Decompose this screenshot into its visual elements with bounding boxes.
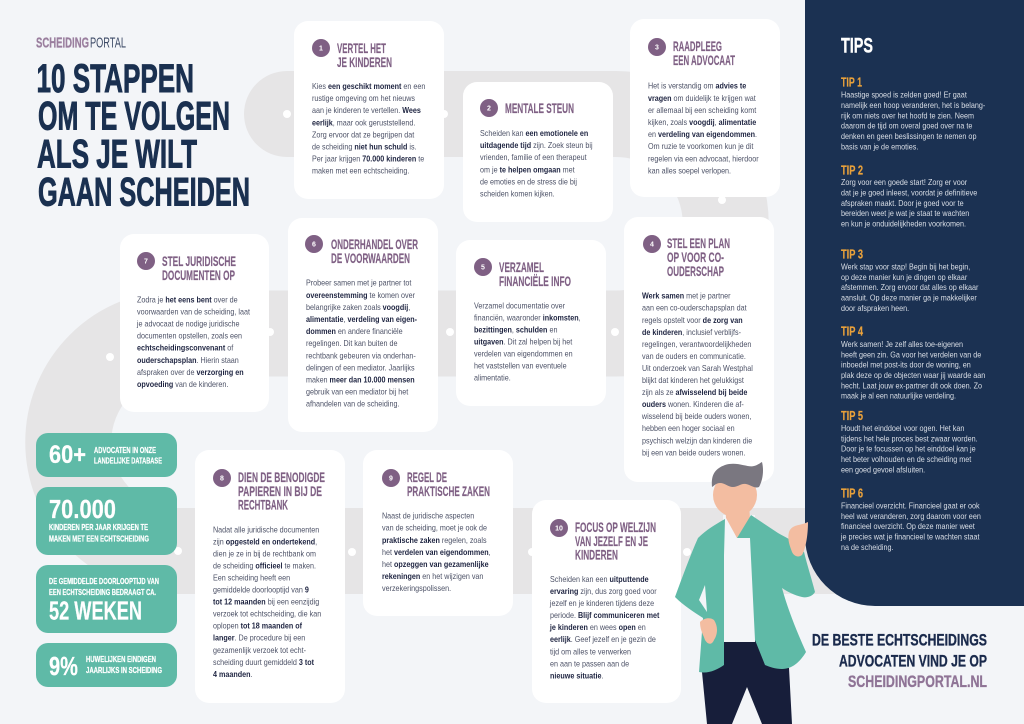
tip 2: TIP 2	[841, 162, 863, 177]
text: step 6: alimentatie, verdeling van eigen-	[306, 315, 417, 324]
icon: number 10: 10	[555, 526, 563, 532]
tip 2: afspraken maakt. Door je goed voor te	[841, 198, 964, 208]
stat: 70.000 kinderen	[36, 487, 177, 555]
logo: ScheidingPortal: SCHEIDING	[36, 34, 89, 52]
heading: step 5	[499, 259, 571, 289]
text: step 9: het opzeggen van gezamenlijke	[382, 560, 489, 569]
icon: number 3: 3	[655, 44, 659, 52]
text: step 9: het verdelen van eigendommen,	[382, 548, 491, 557]
heading: step 8	[238, 469, 325, 512]
heading: step 6: DE VOORWAARDEN	[331, 250, 410, 266]
tip 6: financieel overzicht. Op deze manier weet	[841, 522, 976, 531]
heading: step 9: REGEL DE	[407, 469, 447, 485]
text: step 6: delingen of een mediator. Jaarlijks	[306, 363, 415, 372]
text: step 3: vragen om duidelijk te krijgen wat	[648, 93, 757, 103]
heading: step 1	[337, 40, 392, 70]
tip 4: plak deze op de objecten waar jij waarde aan	[841, 371, 985, 380]
text: step 1: aan je kinderen te vertellen. Wees	[312, 106, 421, 115]
text: step 8: zijn opgesteld en ondertekend,	[213, 537, 317, 546]
text: step 4: aan een co-ouderschapsplan dat	[642, 303, 747, 313]
text: step 1: Per jaar krijgen 70.000 kinderen te	[312, 154, 424, 164]
heading: step 4	[667, 235, 730, 279]
text: step 4: van de ouders en communicatie.	[642, 352, 746, 361]
text: step 6: dommen en andere financiële	[306, 327, 403, 336]
text: step 6: maken meer dan 10.000 mensen	[306, 375, 415, 385]
text: step 5	[474, 301, 581, 382]
text: step 4: wisselend bij beide ouders wonen,	[641, 412, 751, 421]
text: step 4: ouders wonen. Kinderen die af-	[642, 400, 744, 409]
text: step 10: tijd om alles te verwerken	[550, 647, 631, 656]
text: step 2: uitdagende tijd zijn. Zoek steun bij	[480, 141, 593, 150]
tip 1: rijk om niets over het hoofd te zien. Neem	[841, 111, 974, 121]
text: step 8: langer. De procedure bij een	[213, 633, 305, 643]
heading: step 9	[407, 469, 490, 499]
icon: number 10	[550, 519, 568, 537]
tip 1: TIP 1	[841, 75, 862, 90]
icon: number 2: 2	[487, 106, 491, 112]
text: step 9	[382, 511, 491, 593]
text: step 8: gemiddelde doorlooptijd van 9	[213, 585, 309, 595]
panel: step 1	[294, 21, 444, 199]
text: step 3: en verdeling van eigendommen.	[648, 130, 757, 139]
text: step 5: alimentatie.	[474, 373, 511, 382]
text: step 4: Werk samen met je partner	[642, 291, 731, 301]
heading: step 5: VERZAMEL	[499, 259, 544, 275]
tip 1: basis van je de emoties.	[841, 142, 918, 152]
text: step 8: de scheiding officieel te maken.	[213, 561, 316, 571]
text: step 4: bij een van beide ouders wonen.	[642, 448, 745, 457]
tip 6: Financieel overzicht. Financieel gaat er ook	[841, 501, 980, 511]
text: step 4: regelingen, verantwoordelijkheden	[642, 340, 751, 349]
stat: 60+ advocaten: 60+	[49, 441, 86, 469]
tip 2: en kun je onduidelijkheden voorkomen.	[841, 219, 966, 229]
text: step 3: regelen via een advocaat, hierdoor	[648, 154, 759, 163]
heading: step 1: JE KINDEREN	[337, 54, 392, 70]
icon: number 4: 4	[650, 242, 654, 248]
text: step 3: er allemaal bij een scheiding komt	[648, 106, 757, 115]
text: step 2: de emoties en de stress die bij	[480, 177, 577, 186]
tip 3: TIP 3	[841, 247, 863, 262]
heading: step 7	[162, 253, 236, 283]
text: step 4: de kinderen, inclusief verblijfs-	[642, 328, 741, 337]
stat: 70.000 kinderen: MAKEN MET EEN ECHTSCHEIDING	[49, 534, 149, 544]
tip 4: maak je al een natuurlijke verdeling.	[841, 391, 956, 401]
text: step 4: regels opstelt voor de zorg van	[642, 315, 743, 325]
panel: step 4	[624, 217, 774, 482]
text: step 8: tot 12 maanden bij een eenzijdig	[213, 597, 319, 607]
tip 2: Zorg voor een goede start! Zorg er voor	[841, 178, 968, 187]
tip 4	[841, 324, 985, 401]
tip 3: door afspraken heen.	[841, 303, 909, 313]
stat: 70.000 kinderen: KINDEREN PER JAAR KRIJGEN TE	[49, 522, 148, 532]
tip 5: Houdt het einddoel voor ogen. Het kan	[841, 424, 964, 433]
text: step 7: afspraken over de verzorging en	[137, 368, 244, 377]
text: step 5: verdelen van eigendommen en	[474, 349, 573, 358]
text: step 3: kan alles soepel verlopen.	[648, 166, 731, 175]
text: step 6: belangrijke zaken zoals voogdij,	[306, 303, 410, 312]
text: step 8: dien je ze in bij de rechtbank om	[213, 549, 316, 558]
icon: number 9	[382, 469, 400, 487]
text: step 8: Nadat alle juridische documenten	[213, 525, 319, 534]
text: step 9: praktische zaken regelen, zoals	[382, 535, 487, 545]
icon: number 5: 5	[481, 264, 485, 272]
text: step 9: verzekeringspolissen.	[382, 584, 451, 593]
heading: step 9: PRAKTISCHE ZAKEN	[407, 483, 490, 499]
text: step 1	[312, 82, 425, 176]
text: step 10: nieuwe situatie.	[550, 671, 604, 680]
text: step 8: oplopen tot 18 maanden of	[213, 621, 303, 631]
tip 1: denken en geen beslissingen te nemen op	[841, 132, 976, 141]
tip 4: hecht. Laat jouw ex-partner dit ook doen. Zo	[841, 381, 982, 391]
stat: 52 weken: EEN ECHTSCHEIDING BEDRAAGT CA.	[49, 587, 156, 597]
heading: tips: TIPS	[841, 35, 873, 58]
stat: 52 weken	[36, 565, 177, 633]
icon: number 7: 7	[144, 258, 148, 266]
title: GAAN SCHEIDEN	[38, 170, 250, 214]
text: step 1: Kies een geschikt moment en een	[312, 82, 425, 91]
text: step 7: ouderschapsplan. Hierin staan	[137, 355, 239, 365]
title	[36, 57, 250, 214]
heading: step 3: RAADPLEEG	[673, 38, 722, 54]
tip 6: je precies wat je financieel te wachten staat	[840, 532, 980, 542]
text: step 6: rechtbank gebeuren via onderhan-	[306, 351, 416, 360]
tip 2: bereiden weet je wat je staat te wachten	[841, 209, 969, 218]
tip 5: het beter volhouden en de scheiding met	[841, 455, 972, 464]
text: step 7: documenten opstellen, zoals een	[137, 331, 242, 341]
heading: step 8: PAPIEREN IN BIJ DE	[238, 483, 322, 499]
heading: step 10: VAN JEZELF EN JE	[575, 533, 648, 549]
text: step 1: eerlijk, maar ook geruststellend.	[312, 118, 415, 127]
icon: number 5	[474, 258, 492, 276]
text: step 5: het vaststellen van eventuele	[474, 361, 567, 370]
text: step 4: zijn als ze afwisselend bij beide	[642, 388, 747, 397]
text: step 5: Verzamel documentatie over	[474, 301, 565, 310]
text: step 5: bezittingen, schulden en	[474, 325, 557, 334]
stat: 70.000 kinderen: 70.000	[49, 494, 116, 524]
heading: step 6	[331, 236, 418, 266]
text: step 1: maken met een echtscheiding.	[312, 166, 409, 176]
text: step 7: voorwaarden van de scheiding, laat	[137, 307, 251, 316]
tip 1: Haastige spoed is zelden goed! Er gaat	[841, 90, 968, 100]
stat: 60+ advocaten: ADVOCATEN IN ONZE	[94, 445, 156, 455]
text: step 2: vrienden, familie of een therapeut	[480, 153, 587, 162]
text: step 3	[648, 81, 759, 175]
text: step 6: Probeer samen met je partner tot	[306, 278, 412, 288]
text: step 4: psychisch welzijn dan kinderen die	[642, 436, 752, 445]
text: step 4: hebben een hoger sociaal en	[642, 424, 735, 433]
heading: step 8: DIEN DE BENODIGDE	[238, 469, 325, 485]
stat: 9% huwelijken: HUWELIJKEN EINDIGEN	[86, 654, 156, 664]
tip 1: namelijk een hoop veranderen, het is belang-	[841, 101, 986, 110]
text: step 8: 4 maanden.	[213, 670, 253, 679]
text: step 8: scheiding duurt gemiddeld 3 tot	[213, 658, 314, 667]
text: step 9: rekeningen en het wijzigen van	[382, 572, 483, 581]
tip 6: heel wat veranderen, zorg daarom voor een	[841, 511, 981, 521]
text: step 4: blijkt dat kinderen het gelukkigst	[642, 376, 745, 385]
text: step 8: gezamenlijk verzoek tot echt-	[213, 645, 306, 655]
panel: step 3	[630, 19, 780, 197]
stat: 52 weken: 52 WEKEN	[49, 596, 142, 626]
icon: number 7	[137, 252, 155, 270]
heading: step 10	[575, 519, 656, 562]
text: step 8: verzoek tot echtscheiding, die kan	[213, 609, 321, 619]
panel: step 2	[463, 82, 613, 222]
tip 1: daarom de tijd om overal goed over na te	[841, 121, 972, 131]
text: step 6: gebruik van een mediator bij het	[306, 387, 409, 397]
panel: step 7	[120, 234, 269, 412]
icon: number 4	[643, 235, 661, 253]
panel: step 8	[195, 450, 345, 703]
icon: number 6	[305, 235, 323, 253]
tip 4: Werk samen! Je zelf alles toe-eigenen	[841, 340, 963, 349]
text: step 10: Scheiden kan een uitputtende	[550, 575, 649, 584]
panel: tips	[805, 0, 1024, 606]
logo: ScheidingPortal: PORTAL	[90, 34, 126, 52]
text: step 10: periode. Blijf communiceren met	[550, 611, 660, 620]
text: step 5: financiën, waaronder inkomsten,	[474, 313, 581, 322]
text: step 1: rustige omgeving om het nieuws	[312, 94, 415, 103]
tip 6	[840, 485, 981, 552]
heading: step 4: STEL EEN PLAN	[667, 235, 730, 251]
stat: 9% huwelijken: JAARLIJKS IN SCHEIDING	[86, 665, 162, 675]
tip 2	[841, 162, 977, 229]
text: step 7: Zodra je het eens bent over de	[137, 295, 238, 304]
tip 5	[841, 408, 978, 475]
text: step 7: opvoeding van de kinderen.	[137, 380, 228, 389]
tip 6: na de scheiding.	[841, 542, 894, 552]
tip 4: heeft geen zin. Ga voor het verdelen van de	[841, 350, 981, 359]
stat: 52 weken: DE GEMIDDELDE DOORLOOPTIJD VAN	[49, 576, 159, 586]
icon: number 3	[648, 38, 666, 56]
text: step 6: afhandelen van de scheiding.	[306, 399, 399, 409]
tip 3: op deze manier kun je dingen op elkaar	[841, 272, 968, 282]
heading: step 4: OUDERSCHAP	[667, 263, 724, 279]
icon: number 1	[312, 39, 330, 57]
heading: step 3: EEN ADVOCAAT	[673, 52, 735, 68]
icon: number 1: 1	[319, 46, 323, 52]
text: step 6: regelingen. Dit kan buiten de	[306, 339, 397, 348]
text: step 3: kijken, zoals voogdij, alimentatie	[648, 118, 756, 127]
text: step 3: Het is verstandig om advies te	[648, 81, 746, 91]
panel: step 9	[363, 450, 513, 616]
heading: step 4: OP VOOR CO-	[667, 249, 724, 265]
text: step 10: en aan te passen aan de	[550, 659, 629, 668]
tip 1	[841, 75, 986, 152]
text: step 2: om je te helpen omgaan met	[480, 165, 575, 174]
stat: 9% huwelijken: 9%	[49, 651, 78, 681]
tip 3: afstemmen. Zorg ervoor dat alles op elkaar	[841, 283, 979, 292]
tip 3	[841, 247, 979, 313]
text: step 5: uitgaven. Dit zal helpen bij het	[474, 337, 573, 346]
icon: number 8: 8	[220, 476, 224, 482]
text: step 2: scheiden komen kijken.	[480, 189, 555, 199]
heading: step 2: MENTALE STEUN	[505, 100, 574, 116]
icon: number 8	[213, 469, 231, 487]
text: step 3: Om ruzie te voorkomen kun je dit	[648, 142, 754, 151]
panel: statistics	[36, 433, 177, 687]
text: step 4: Uit onderzoek van Sarah Westphal	[642, 364, 753, 373]
text: step 8	[213, 525, 321, 679]
text: step 2	[480, 129, 593, 199]
tip 5: TIP 5	[841, 408, 863, 423]
call to action	[812, 631, 987, 691]
tip 2: dat je je goed inleest, voordat je definitieve	[841, 188, 977, 198]
heading: step 7: DOCUMENTEN OP	[162, 267, 235, 283]
text: step 4	[641, 291, 753, 457]
text: step 10: je kinderen en wees open en	[549, 623, 646, 632]
text: step 6: overeenstemming te komen over	[306, 290, 415, 300]
text: step 9: Naast de juridische aspecten	[382, 511, 474, 521]
illustration: man in teal jacket	[675, 462, 815, 724]
text: step 9: van de scheiding, moet je ook de	[382, 523, 487, 533]
panel: step 10	[532, 500, 681, 703]
heading: step 5: FINANCIËLE INFO	[499, 273, 571, 289]
icon: number 2	[480, 99, 498, 117]
tip 5: Door je te focussen op het einddoel kan je	[841, 444, 976, 454]
text: step 1: de scheiding niet hun schuld is.	[312, 142, 417, 152]
heading: step 3	[673, 38, 735, 68]
text: step 8: Een scheiding heeft een	[213, 573, 290, 583]
text: step 1: Zorg ervoor dat ze begrijpen dat	[312, 130, 415, 139]
tip 4: TIP 4	[841, 324, 864, 339]
stat: 60+ advocaten	[36, 433, 177, 477]
text: step 10	[549, 575, 660, 680]
text: step 7: echtscheidingsconvenant of	[137, 343, 234, 353]
panel: step 5	[456, 240, 606, 406]
stat: 9% huwelijken	[36, 643, 177, 687]
text: step 10: jezelf en je kinderen tijdens deze	[549, 599, 654, 608]
heading: step 6: ONDERHANDEL OVER	[331, 236, 418, 252]
text: step 2: Scheiden kan een emotionele en	[480, 129, 589, 138]
heading: step 10: KINDEREN	[575, 546, 618, 562]
title: ALS JE WILT	[37, 132, 197, 176]
icon: number 6: 6	[312, 242, 316, 248]
heading: step 10: FOCUS OP WELZIJN	[575, 519, 656, 535]
stat: 60+ advocaten: LANDELIJKE DATABASE	[94, 456, 162, 466]
tip 3: Werk stap voor stap! Begin bij het begin,	[841, 262, 970, 272]
text: step 10: eerlijk. Geef jezelf en je gezin de	[550, 635, 656, 644]
tip 4: inboedel met post-its door de woning, en	[841, 360, 971, 370]
heading: step 7: STEL JURIDISCHE	[162, 253, 236, 269]
title: OM TE VOLGEN	[38, 94, 230, 138]
text: step 7: je advocaat de nodige juridische	[136, 319, 240, 329]
title: 10 STAPPEN	[36, 57, 194, 101]
text: step 7	[136, 295, 251, 389]
text: step 6	[306, 278, 417, 409]
heading: step 1: VERTEL HET	[337, 40, 386, 56]
icon: number 9: 9	[389, 476, 393, 482]
text: step 10: ervaring zijn, dus zorg goed voor	[550, 587, 657, 596]
tip 6: TIP 6	[841, 485, 863, 500]
tip 5: tijdens het hele proces best zwaar worden.	[841, 434, 978, 443]
tip 5: een goed gevoel afsluiten.	[841, 465, 925, 475]
heading: step 8: RECHTBANK	[238, 496, 288, 512]
panel: step 6	[288, 218, 438, 432]
tip 3: aansluit. Op deze manier ga je makkelijker	[841, 293, 977, 303]
